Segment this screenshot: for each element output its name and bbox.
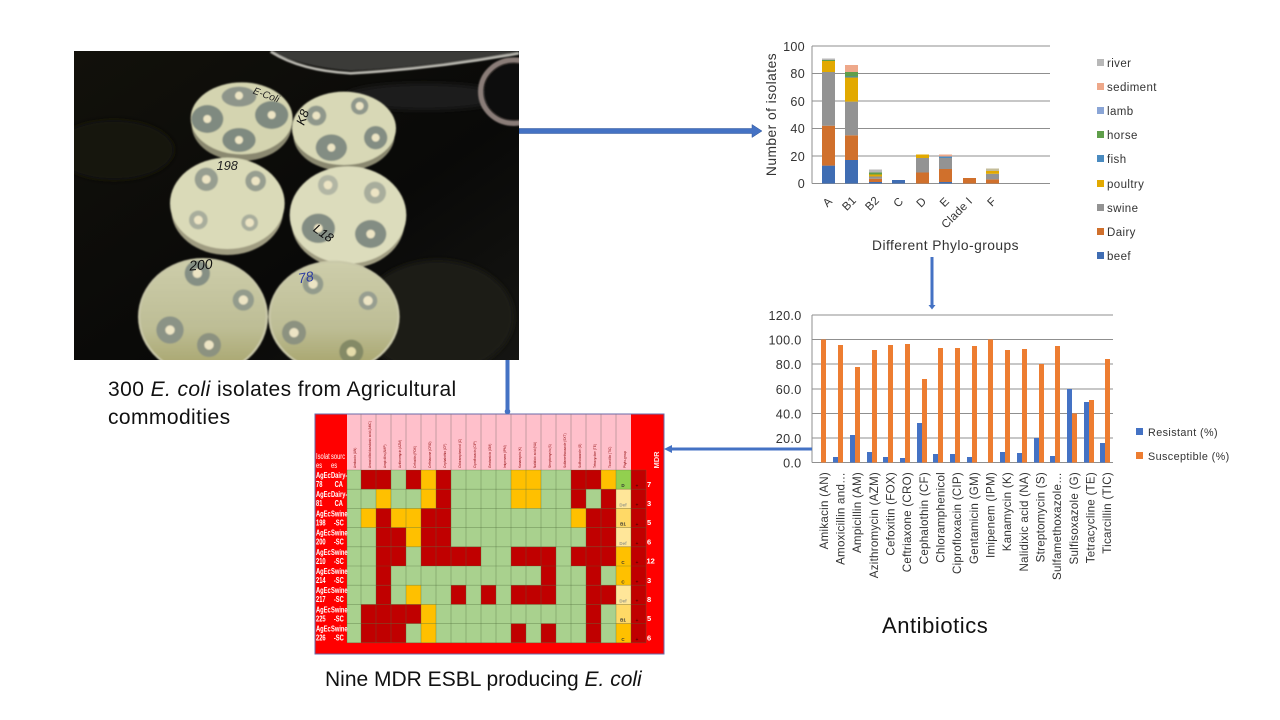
- isolate labels: AgEc: [316, 472, 331, 480]
- phylo-group column: B1: [620, 522, 626, 526]
- tray at top: [271, 51, 519, 71]
- phylo-group column: Def: [619, 541, 627, 546]
- isolate labels: 200: [316, 539, 326, 547]
- antibiotic labels: Streptomycin (S): [1034, 472, 1048, 562]
- antibiotic column headers: Nalidixic acid (NA): [533, 442, 537, 468]
- row 198: [361, 508, 616, 528]
- category labels: B2: [863, 195, 882, 213]
- heatmap: MDR ESBL producing isolates: [314, 414, 664, 654]
- MDR counts: 3: [647, 499, 651, 508]
- source labels: Swine: [331, 587, 348, 595]
- positive marker column: +: [636, 522, 639, 528]
- antibiotic column headers: Sulfisoxazole (G): [578, 444, 582, 468]
- antibiotic column headers: Chloramphenicol (C): [458, 439, 462, 468]
- isolate labels: 198: [316, 520, 326, 528]
- legend: resistant and susceptible: [1136, 427, 1230, 463]
- positive marker column: +: [636, 541, 639, 547]
- category labels: [821, 195, 999, 231]
- handwritten plate labels: 198: [217, 159, 238, 173]
- positive marker column: [631, 470, 646, 643]
- MDR counts: [646, 480, 655, 642]
- row 200: [376, 528, 616, 547]
- antibiotic column headers: Cephalothin (CF): [443, 444, 447, 468]
- plate 5: [138, 258, 268, 375]
- row 214: [376, 566, 601, 585]
- positive marker column: +: [636, 484, 639, 490]
- MDR counts: 6: [647, 634, 651, 642]
- row 226: [361, 624, 601, 643]
- phylo-group column: [616, 470, 631, 643]
- antibiotic labels: Ticarcillin (TIC): [1101, 472, 1114, 554]
- y-axis numbers: 40.0: [776, 408, 802, 422]
- phylo-group column: C: [621, 637, 625, 642]
- caption: source isolates: [108, 378, 457, 429]
- isolate labels: AgEc: [316, 491, 331, 499]
- stacked bar chart: phylo-groups: [764, 40, 1050, 253]
- arrow: antibiotics chart to heatmap: [664, 445, 812, 453]
- positive marker column: +: [636, 580, 639, 586]
- caption: antibiotics: Antibiotics: [882, 613, 988, 638]
- y-axis numbers: 0: [798, 177, 805, 191]
- bar C: [892, 180, 905, 184]
- bar Clade I: [963, 178, 976, 184]
- isolate labels: [316, 453, 331, 643]
- source labels: -SC: [334, 635, 344, 643]
- arrow: photo to phylo chart: [519, 124, 762, 138]
- y-axis numbers: 80.0: [776, 358, 802, 372]
- handwritten plate labels: 200: [188, 256, 213, 274]
- isolate labels: Isolat: [316, 453, 330, 461]
- plate 3: [171, 165, 283, 255]
- legend: isolate sources: poultry: [1107, 179, 1144, 191]
- caption: source isolates: 300 E. coli isolates from Agricultural: [108, 378, 457, 401]
- source labels: [331, 453, 348, 643]
- antibiotic labels: Tetracycline (TE): [1084, 472, 1098, 563]
- source labels: sourc: [331, 453, 346, 461]
- source labels: Dairy-: [331, 491, 348, 499]
- antibiotic column headers: Streptomycin (S): [548, 444, 552, 468]
- antibiotic column headers: Ceftriaxone (CRO): [428, 442, 432, 468]
- antibiotic column headers: Azithromycin (AZM): [398, 440, 402, 468]
- isolate labels: 210: [316, 558, 326, 566]
- antibiotic labels: Cefoxitin (FOX): [884, 472, 898, 556]
- source labels: es: [331, 462, 338, 470]
- source labels: -SC: [334, 520, 344, 528]
- bar B1: [845, 65, 858, 184]
- arrow: phylo chart to antibiotics chart: [928, 257, 936, 310]
- MDR counts: 12: [646, 556, 655, 566]
- antibiotic labels: Amikacin (AN): [818, 472, 831, 549]
- legend: isolate sources: sediment: [1107, 82, 1157, 94]
- isolate labels: es: [316, 462, 323, 470]
- y-axis numbers: 100: [783, 40, 805, 54]
- y-axis numbers: [768, 309, 802, 470]
- bar B2: [869, 170, 882, 184]
- antibiotic labels: Kanamycin (K): [1001, 472, 1014, 551]
- isolate labels: 225: [316, 616, 326, 624]
- antibiotic column headers: Tetracycline (TE): [593, 444, 597, 468]
- antibiotic column headers: Amikacin (AN): [353, 448, 357, 468]
- handwritten plate labels: L18: [311, 222, 336, 245]
- bar D: [916, 154, 929, 184]
- legend: isolate sources: beef: [1107, 251, 1131, 263]
- MDR counts: 6: [647, 538, 651, 546]
- photo: antibiotic disc diffusion plates: [74, 51, 519, 360]
- row 78: [361, 470, 616, 489]
- phylo-group column: C: [621, 580, 625, 584]
- source labels: Swine: [331, 626, 348, 634]
- antibiotic labels: Sulfisoxazole (G): [1068, 472, 1081, 565]
- y-axis numbers: 20.0: [776, 432, 802, 446]
- antibiotic column headers: Amoxicillin/clavulanic acid (AMC): [368, 421, 372, 468]
- MDR counts: 5: [647, 614, 651, 623]
- antibiotic column headers: Cefoxitin (FOX): [413, 446, 417, 468]
- phylo-group column: C: [621, 560, 625, 565]
- category labels: B1: [840, 195, 859, 213]
- positive marker column: +: [636, 560, 639, 566]
- MDR counts: 8: [647, 595, 651, 604]
- y-axis title: Number of isolates: [764, 53, 779, 176]
- legend: isolate sources: swine: [1107, 203, 1138, 215]
- source labels: Swine: [331, 607, 348, 615]
- antibiotic labels: Ceftriaxone (CRO): [901, 472, 914, 572]
- positive marker column: +: [636, 618, 639, 624]
- antibiotic labels: Amoxicillin and…: [834, 472, 848, 565]
- antibiotic labels: Imipenem (IPM): [984, 472, 998, 558]
- y-axis numbers: 120.0: [768, 309, 802, 323]
- legend: isolate sources: lamb: [1107, 106, 1134, 118]
- handwritten plate labels: K8: [294, 108, 312, 127]
- antibiotic labels: Cephalothin (CF): [918, 472, 931, 564]
- plate 1: [192, 89, 292, 161]
- source labels: -SC: [334, 558, 344, 566]
- isolate labels: 226: [316, 635, 326, 643]
- x-axis title: Different Phylo-groups: [872, 238, 1019, 253]
- susceptible bars: [821, 340, 1110, 462]
- y-axis numbers: 80: [790, 67, 805, 81]
- antibiotic labels: Nalidixic acid (NA): [1018, 472, 1031, 571]
- isolate labels: AgEc: [316, 626, 331, 634]
- isolate labels: AgEc: [316, 587, 331, 595]
- antibiotic labels: Ciprofloxacin (CIP): [951, 472, 964, 574]
- positive marker column: +: [636, 598, 639, 604]
- y-axis numbers: 60.0: [776, 383, 802, 397]
- y-axis numbers: [783, 40, 805, 191]
- isolate labels: 81: [316, 500, 323, 508]
- phylo-group column: Def: [619, 598, 627, 604]
- source labels: -SC: [334, 596, 344, 604]
- antibiotic labels: Gentamicin (GM): [968, 472, 981, 564]
- MDR counts: 3: [647, 576, 651, 585]
- antibiotic column headers: Sulfamethoxazole (SXT): [563, 433, 567, 468]
- antibiotic labels: Ampicillin (AM): [851, 472, 864, 553]
- antibiotic column headers: Gentamicin (GM): [488, 444, 492, 468]
- legend: isolate sources: Dairy: [1107, 227, 1136, 239]
- antibiotic column headers: Kanamycin (K): [518, 447, 522, 468]
- MDR heading: MDR: [652, 451, 661, 469]
- row 225: [361, 604, 601, 624]
- isolate labels: AgEc: [316, 607, 331, 615]
- plate 2: [293, 99, 395, 171]
- category labels: E: [938, 196, 952, 210]
- antibiotic labels: Sulfamethoxazole…: [1051, 472, 1064, 580]
- antibiotic labels: Azithromycin (AZM): [868, 472, 881, 578]
- bar E: [939, 154, 952, 184]
- category labels: A: [821, 196, 835, 210]
- antibiotic column headers: Ampicillin (AMP): [383, 445, 387, 468]
- row 210: [376, 547, 616, 566]
- grid lines: [347, 470, 646, 643]
- row 81: [376, 489, 616, 508]
- antibiotic column headers: Phylo-group: [623, 451, 627, 468]
- phylo-group column: Def: [619, 502, 627, 508]
- resistant bars: [833, 389, 1105, 462]
- isolate labels: AgEc: [316, 568, 331, 576]
- row 217: [376, 585, 616, 604]
- source labels: Dairy-: [331, 472, 348, 480]
- metal ring: [481, 60, 547, 123]
- category labels: Clade I: [940, 196, 975, 231]
- y-axis numbers: 40: [790, 122, 805, 136]
- isolate labels: AgEc: [316, 511, 331, 519]
- isolate labels: 78: [316, 481, 323, 489]
- MDR counts: 7: [647, 480, 651, 489]
- legend: isolate sources: river: [1107, 58, 1131, 70]
- caption: source isolates: commodities: [108, 406, 230, 429]
- antibiotic labels: Chloramphenicol: [934, 472, 948, 563]
- antibiotic column headers: Ciprofloxacin (CIP): [473, 441, 477, 468]
- plate 6: [268, 261, 400, 373]
- handwritten plate labels: 78: [297, 268, 315, 286]
- isolate labels: 214: [316, 577, 326, 585]
- isolate labels: AgEc: [316, 530, 331, 538]
- source labels: -SC: [334, 616, 344, 624]
- source labels: Swine: [331, 530, 348, 538]
- source labels: -SC: [334, 539, 344, 547]
- bar F: [986, 168, 999, 184]
- category labels: F: [985, 196, 999, 209]
- source labels: Swine: [331, 568, 348, 576]
- connector: photo to heatmap: [504, 360, 510, 414]
- handwritten plate labels: E-Coli: [251, 86, 281, 106]
- handwritten plate labels: [188, 86, 336, 286]
- legend: isolate sources: fish: [1107, 154, 1126, 166]
- source labels: -SC: [334, 577, 344, 585]
- legend: isolate sources: horse: [1107, 130, 1138, 142]
- isolate labels: AgEc: [316, 549, 331, 557]
- y-axis numbers: 0.0: [783, 456, 802, 470]
- category labels: C: [892, 196, 906, 210]
- isolate labels: 217: [316, 596, 326, 604]
- category labels: D: [915, 196, 929, 210]
- y-axis numbers: 20: [790, 150, 805, 164]
- source labels: Swine: [331, 549, 348, 557]
- MDR counts: 5: [647, 518, 651, 527]
- phylo-group column: B1: [620, 618, 626, 622]
- source labels: CA: [335, 481, 343, 489]
- plate 4: [291, 175, 405, 268]
- positive marker column: +: [636, 637, 639, 643]
- caption: MDR ESBL isolates: Nine MDR ESBL producing E. coli: [325, 668, 642, 691]
- bar A: [822, 58, 835, 184]
- legend: resistant and susceptible: Susceptible (%): [1148, 451, 1230, 463]
- y-axis numbers: 100.0: [768, 334, 802, 348]
- phylo-group column: D: [621, 483, 625, 488]
- legend: resistant and susceptible: Resistant (%): [1148, 427, 1218, 439]
- source labels: CA: [335, 500, 343, 508]
- y-axis numbers: 60: [790, 95, 805, 109]
- legend: isolate sources: [1097, 58, 1157, 263]
- antibiotic column headers: [353, 421, 627, 468]
- bar chart: antibiotic resistance: [768, 309, 1114, 580]
- antibiotic labels: [818, 472, 1114, 580]
- source labels: Swine: [331, 511, 348, 519]
- antibiotic column headers: Imipenem (IPM): [503, 445, 507, 468]
- positive marker column: +: [636, 502, 639, 508]
- antibiotic column headers: Ticarcillin (TIC): [608, 447, 612, 468]
